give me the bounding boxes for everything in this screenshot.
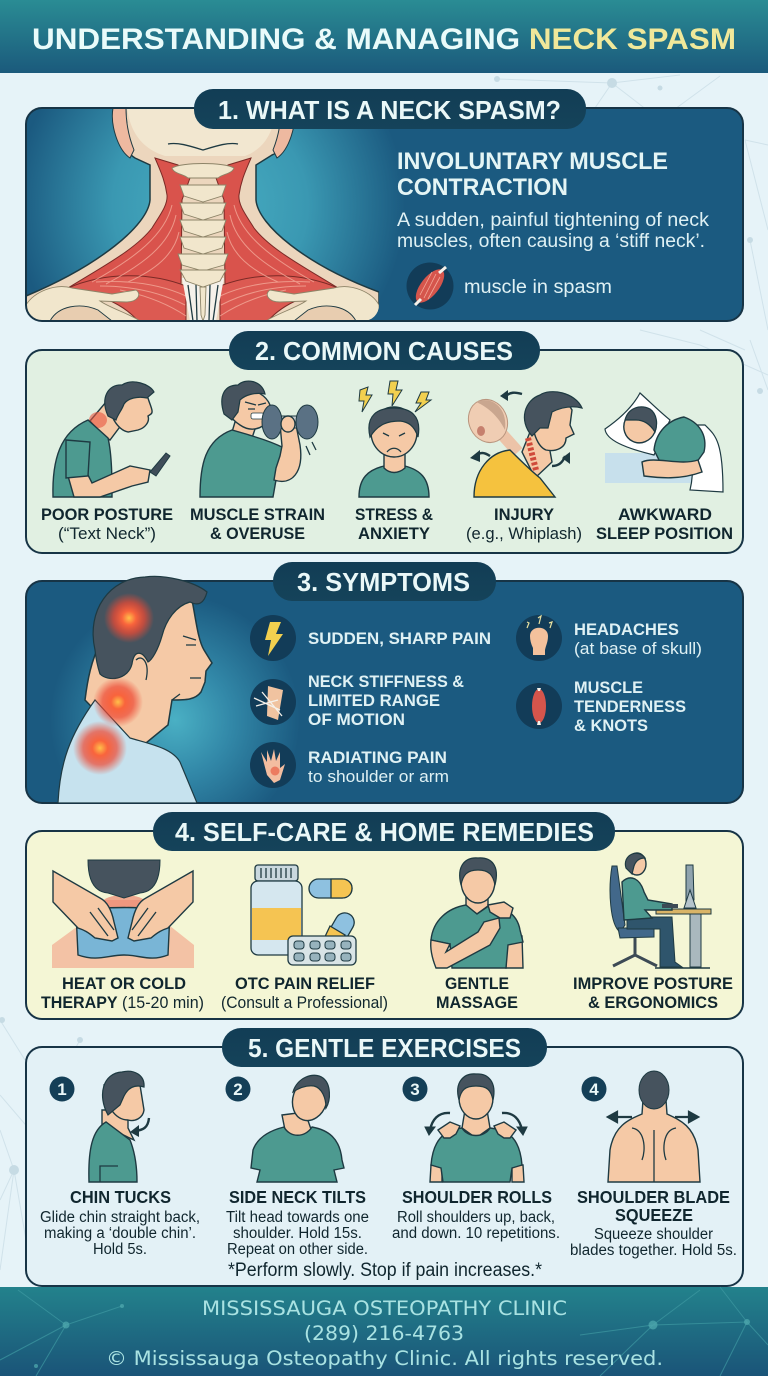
label: awkward sleep position (596, 505, 733, 543)
label: awkward sleep position: SLEEP POSITION (596, 524, 733, 543)
section heading 1: 1. WHAT IS A NECK SPASM? (218, 95, 561, 125)
exercise 3 text: Roll shoulders up, back, (397, 1209, 555, 1226)
copyright: © Mississauga Osteopathy Clinic. All rights reserved. (106, 1347, 663, 1370)
symptom: muscle tenderness: MUSCLE (574, 678, 643, 697)
illustration: neck muscle anatomy (26, 108, 379, 321)
exercise 2 text: shoulder. Hold 15s. (233, 1225, 362, 1242)
label: stress and anxiety: STRESS & (355, 505, 433, 524)
label: otc pain relief: OTC PAIN RELIEF (235, 974, 375, 993)
shoulder bones (26, 287, 140, 321)
label: injury: INJURY (494, 505, 555, 524)
exercise 2 text: Tilt head towards one (226, 1209, 369, 1226)
label: improve posture (573, 974, 733, 1012)
label: muscle strain (190, 505, 325, 543)
exercise 3 text: and down. 10 repetitions. (392, 1225, 560, 1242)
icon: otc pain relief (251, 865, 358, 965)
section heading 2: 2. COMMON CAUSES (255, 336, 513, 366)
section heading 3 (273, 562, 496, 601)
exercise 2 text: Repeat on other side. (227, 1241, 368, 1258)
icon: muscle strain (200, 381, 318, 497)
definition text (397, 210, 710, 252)
caution note: *Perform slowly. Stop if pain increases.* (228, 1260, 543, 1281)
right muscles (216, 158, 338, 288)
exercise 1: chin tucks (50, 1071, 149, 1182)
exercise 1 text (40, 1187, 200, 1258)
heading: involuntary muscle contraction: INVOLUNTARY MUSCLE (397, 148, 668, 175)
symptom: headaches: HEADACHES (574, 620, 679, 639)
label: poor posture: (“Text Neck”) (58, 524, 156, 543)
label: gentle massage (436, 974, 518, 1012)
section heading 4: 4. SELF-CARE & HOME REMEDIES (175, 817, 594, 847)
label: poor posture (41, 505, 173, 543)
symptom: sudden sharp pain (250, 615, 491, 661)
label: injury (466, 505, 582, 543)
heading: involuntary muscle contraction (397, 148, 668, 201)
icon: stress and anxiety (359, 381, 431, 497)
symptom: muscle tenderness (516, 678, 686, 735)
section heading 3: 3. SYMPTOMS (297, 567, 470, 597)
symptom: neck stiffness: NECK STIFFNESS & (308, 672, 464, 691)
icon label: muscle in spasm (464, 277, 612, 298)
icon: improve posture and ergonomics (610, 853, 711, 968)
footer network pattern (0, 1287, 768, 1376)
exercise 1 text: Hold 5s. (93, 1241, 147, 1258)
symptom: muscle tenderness: & KNOTS (574, 716, 648, 735)
icon: injury whiplash (461, 390, 582, 497)
section heading 1 (194, 89, 586, 129)
left muscles (68, 158, 190, 288)
symptom: radiating pain: RADIATING PAIN (308, 748, 447, 767)
exercise 1: chin tucks: 1 (57, 1080, 67, 1099)
symptom: radiating pain (250, 742, 449, 788)
section heading 2 (229, 331, 540, 370)
symptom: neck stiffness: OF MOTION (308, 710, 405, 729)
definition text: muscles, often causing a ‘stiff neck’. (397, 231, 705, 252)
symptom: headaches: (at base of skull) (574, 639, 702, 658)
panel: common causes (26, 331, 743, 553)
exercise 2 text (226, 1187, 369, 1258)
panel: self-care and home remedies (26, 812, 743, 1019)
clinic name: MISSISSAUGA OSTEOPATHY CLINIC (202, 1297, 567, 1320)
exercise 3 text: SHOULDER ROLLS (402, 1187, 552, 1207)
label: gentle massage: GENTLE (445, 974, 509, 993)
exercise 4: shoulder blade squeeze: 4 (589, 1080, 599, 1099)
label: stress and anxiety (355, 505, 433, 543)
panel: what is a neck spasm (26, 89, 743, 321)
exercise 4 text: Squeeze shoulder (594, 1226, 713, 1243)
panel: gentle exercises (26, 1028, 743, 1286)
icon: heat or cold therapy (52, 860, 194, 968)
symptom: neck stiffness: LIMITED RANGE (308, 691, 440, 710)
illustration: man with pain points (58, 576, 212, 803)
exercise 2: side neck tilts (226, 1073, 344, 1182)
label: heat or cold therapy: THERAPY (15-20 min) (41, 993, 204, 1012)
symptom: headaches (516, 615, 702, 661)
icon: poor posture (53, 382, 170, 497)
label: poor posture: POOR POSTURE (41, 505, 173, 524)
heading: involuntary muscle contraction: CONTRACTION (397, 174, 568, 201)
exercise 4: shoulder blade squeeze (582, 1071, 700, 1182)
panel: symptoms (26, 562, 743, 803)
label: muscle strain: & OVERUSE (210, 524, 305, 543)
label: muscle strain: MUSCLE STRAIN (190, 505, 325, 524)
label: improve posture: IMPROVE POSTURE (573, 974, 733, 993)
exercise 3: shoulder rolls (402, 1074, 527, 1182)
exercise 1 text: Glide chin straight back, (40, 1209, 200, 1226)
symptom: radiating pain: to shoulder or arm (308, 767, 449, 786)
label: heat or cold therapy: HEAT OR COLD (62, 974, 186, 993)
label: stress and anxiety: ANXIETY (358, 524, 431, 543)
symptom: sudden sharp pain: SUDDEN, SHARP PAIN (308, 629, 491, 648)
definition text: A sudden, painful tightening of neck (397, 210, 710, 231)
exercise 2 text: SIDE NECK TILTS (229, 1187, 366, 1207)
label: heat or cold therapy (41, 974, 204, 1012)
phone number: (289) 216-4763 (304, 1322, 464, 1345)
icon: gentle massage (431, 858, 523, 968)
exercise 3 text (392, 1187, 560, 1242)
label: gentle massage: MASSAGE (436, 993, 518, 1012)
icon: muscle in spasm (406, 262, 454, 310)
label: awkward sleep position: AWKWARD (618, 505, 712, 524)
exercise 1 text: making a ‘double chin’. (44, 1225, 196, 1242)
icon: awkward sleep position (605, 393, 723, 492)
exercise 2: side neck tilts: 2 (233, 1080, 243, 1099)
section heading 5 (222, 1028, 547, 1067)
label: injury: (e.g., Whiplash) (466, 524, 582, 543)
footer (0, 1287, 768, 1376)
exercise 4 text: SQUEEZE (615, 1205, 693, 1225)
title: UNDERSTANDING & MANAGING NECK SPASM (32, 23, 736, 56)
exercise 4 text: SHOULDER BLADE (577, 1187, 730, 1207)
section heading 5: 5. GENTLE EXERCISES (248, 1033, 521, 1063)
spine (172, 164, 234, 178)
header band (0, 0, 768, 73)
symptom: muscle tenderness: TENDERNESS (574, 697, 686, 716)
exercise 4 text (570, 1187, 737, 1259)
symptom: neck stiffness (250, 672, 464, 729)
exercise 3: shoulder rolls: 3 (410, 1080, 420, 1099)
central tendon (182, 278, 224, 321)
label: otc pain relief: (Consult a Professional) (221, 993, 388, 1012)
label: otc pain relief (221, 974, 388, 1012)
exercise 4 text: blades together. Hold 5s. (570, 1242, 737, 1259)
label: improve posture: & ERGONOMICS (588, 993, 718, 1012)
exercise 1 text: CHIN TUCKS (70, 1187, 171, 1207)
